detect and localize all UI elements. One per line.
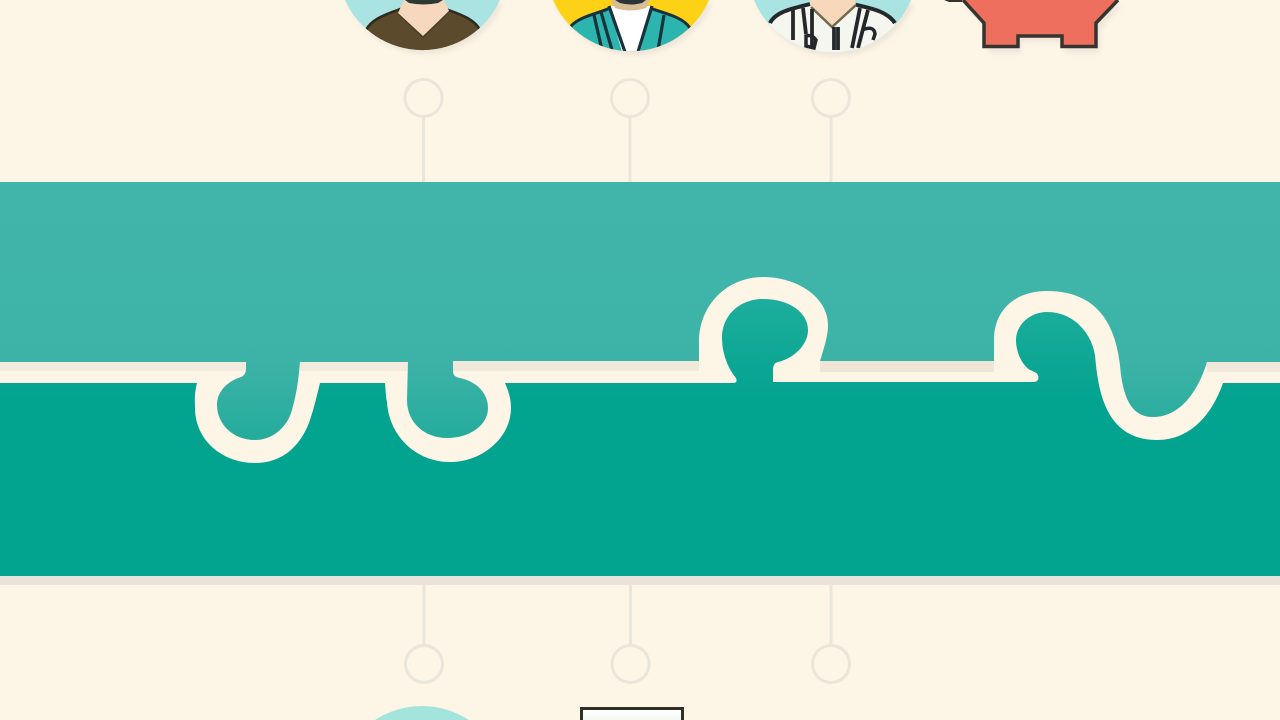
connector: top middle node bbox=[612, 80, 648, 182]
upper puzzle band bbox=[0, 182, 1280, 440]
icon: bottom teal circle bbox=[375, 706, 469, 720]
connector: bottom left node bbox=[406, 585, 442, 682]
connector: top right node bbox=[812, 80, 850, 182]
connector: bottom right node bbox=[812, 585, 850, 682]
connector: top left node bbox=[405, 80, 442, 182]
avatar: person in teal jacket bbox=[553, 0, 712, 60]
avatar: doctor in white coat bbox=[754, 0, 914, 60]
lower puzzle band bbox=[0, 299, 1280, 576]
icon: piggy bank bbox=[944, 0, 1121, 53]
avatar: man in brown jacket bbox=[345, 0, 501, 54]
seam shading along straight edges bbox=[0, 361, 1280, 372]
connector: bottom middle node bbox=[612, 585, 649, 682]
icon: bottom document bbox=[582, 708, 682, 720]
shadow under bottom band bbox=[0, 575, 1280, 585]
